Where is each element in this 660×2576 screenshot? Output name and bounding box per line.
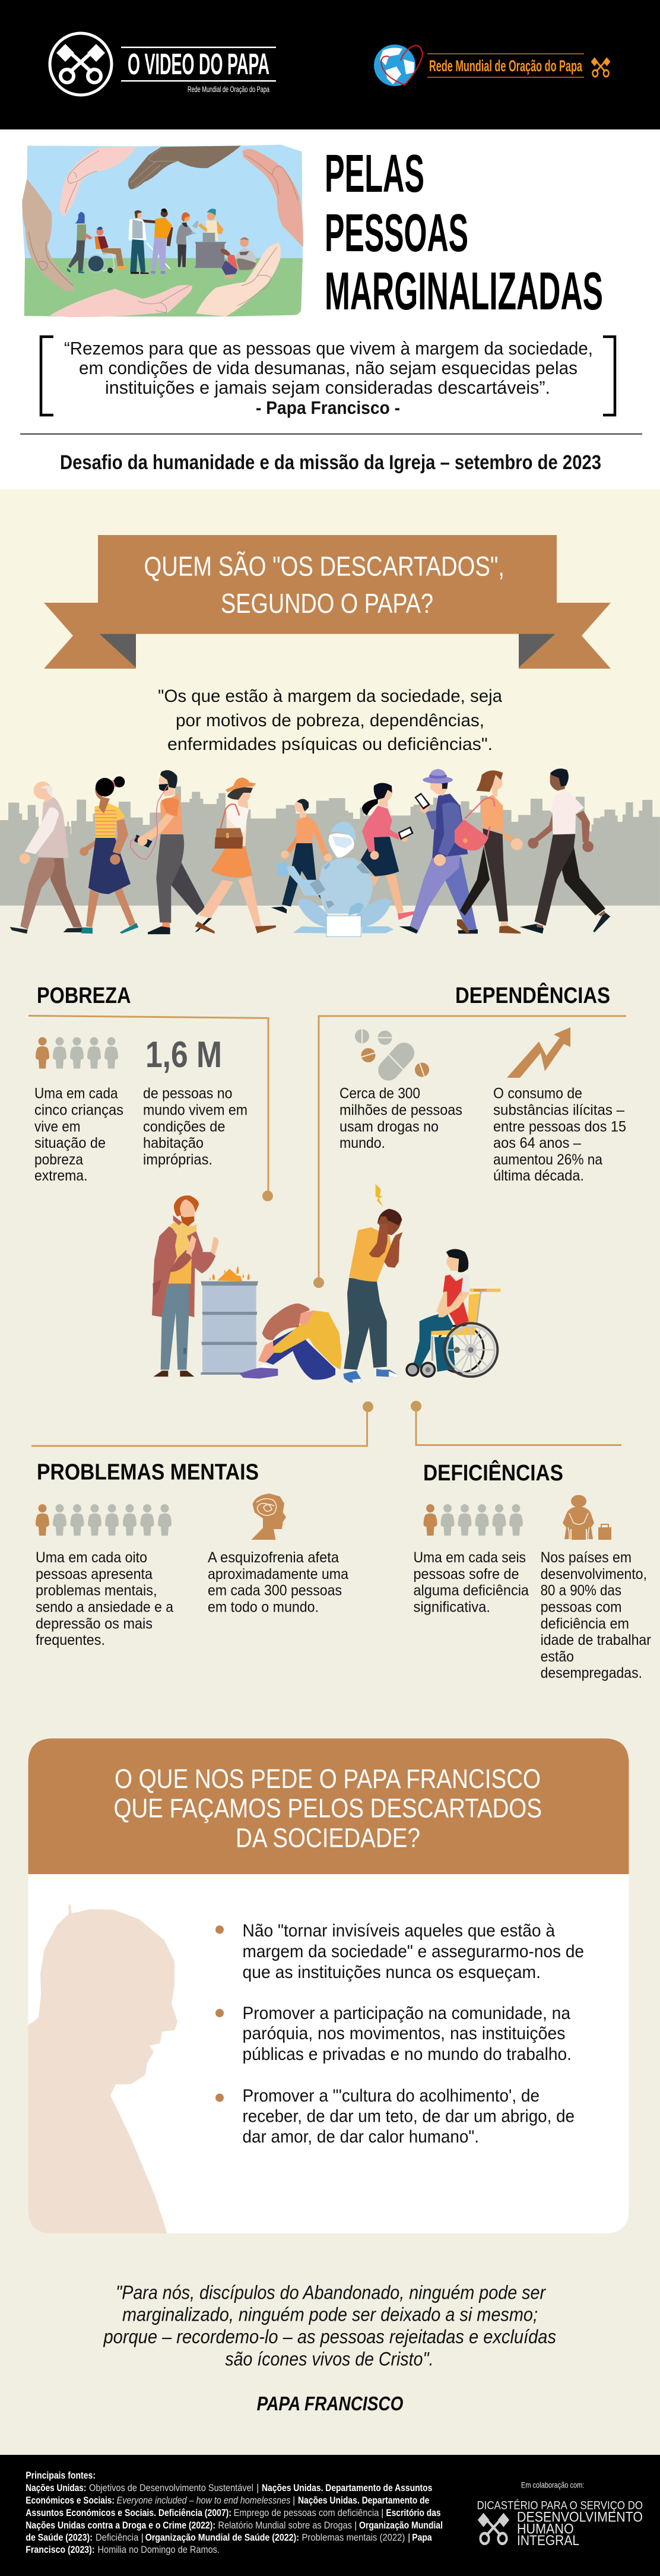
sources text: | xyxy=(408,2532,410,2543)
sources text: Organização Mundial de Saúde (2022): xyxy=(145,2532,299,2543)
person: bearded man with phone xyxy=(131,770,205,934)
sources text: Principais fontes: xyxy=(26,2470,96,2481)
text: mental problems stat: problemas mentais, xyxy=(36,1583,157,1599)
sources text: Organização Mundial xyxy=(359,2520,443,2531)
person: woman with blue skirt xyxy=(80,776,138,933)
text: one in five children: situação de xyxy=(34,1135,106,1151)
heading: Pobreza: POBREZA xyxy=(37,983,131,1008)
text: schizophrenia stat: em cada 300 pessoas xyxy=(208,1583,342,1599)
figure: crouching woman xyxy=(239,1303,342,1380)
text: schizophrenia stat: em todo o mundo. xyxy=(208,1599,319,1615)
panel: what the Pope asks xyxy=(28,1739,629,2233)
text: unemployment stat: idade de trabalhar xyxy=(541,1632,651,1648)
text: unemployment stat: 80 a 90% das xyxy=(541,1583,621,1599)
bullet one: Não "tornar invisíveis aqueles que estão à xyxy=(242,1921,555,1941)
text: illicit substances xyxy=(493,1086,626,1184)
sources text: Everyone included – how to end homelessnes xyxy=(116,2495,291,2506)
bullet three: Promover a "'cultura do acolhimento', de xyxy=(242,2086,540,2106)
text: mental problems stat: pessoas apresenta xyxy=(36,1566,153,1583)
sources text: | xyxy=(141,2532,144,2543)
text: drug users: mundo. xyxy=(339,1135,385,1151)
person: seated beggar (pale blue) xyxy=(277,821,394,936)
people: man in wheelchair xyxy=(88,227,126,273)
text: schizophrenia stat: aproximadamente uma xyxy=(208,1566,348,1583)
text: disability stat: alguma deficiência xyxy=(413,1583,529,1599)
text: illicit substances: O consumo de xyxy=(493,1086,582,1102)
figure: distressed man xyxy=(343,1184,402,1382)
text: illicit substances: substâncias ilícitas – xyxy=(493,1102,624,1119)
logo: O Video do Papa: O VIDEO DO PAPA xyxy=(128,48,269,81)
text: housing: impróprias. xyxy=(143,1151,212,1168)
collaboration logo: Dicastério: DESENVOLVIMENTO xyxy=(517,2509,643,2525)
text: disability stat xyxy=(413,1549,529,1615)
text: mental problems stat: sendo a ansiedade e a xyxy=(36,1599,173,1615)
panel heading band: O QUE NOS PEDE O PAPA FRANCISCO xyxy=(115,1764,541,1794)
bullet three: dar amor, de dar calor humano". xyxy=(242,2127,479,2147)
sources text: Objetivos de Desenvolvimento Sustentável xyxy=(89,2482,253,2493)
text: illicit substances: entre pessoas dos 15 xyxy=(493,1119,626,1135)
attribution: Papa Francisco: PAPA FRANCISCO xyxy=(257,2393,404,2414)
connector: mental problems xyxy=(31,1401,373,1446)
sources text: Nações Unidas. Departamento de xyxy=(298,2495,429,2506)
icon row: one in five people xyxy=(36,1037,118,1069)
person: man in white shirt xyxy=(520,768,610,933)
bullet one: que as instituições nunca os esqueçam. xyxy=(242,1963,541,1982)
icon: rising arrow xyxy=(507,1027,570,1078)
hand: top right xyxy=(242,149,303,247)
footer band xyxy=(0,2455,660,2576)
person: woman with hat and bag xyxy=(195,777,276,933)
sources text: de Saúde (2023): xyxy=(26,2532,93,2543)
sources text: Francisco (2023): xyxy=(26,2544,95,2555)
logo: O Video do Papa xyxy=(50,33,276,95)
text: unemployment stat: desempregadas. xyxy=(541,1665,642,1682)
text: one in five children: cinco crianças xyxy=(34,1102,123,1119)
sources text: | xyxy=(354,2520,357,2531)
ribbon banner: quem são os descartados xyxy=(44,535,611,669)
sources text: Problemas mentais (2022) xyxy=(302,2532,405,2543)
text: one in five children: extrema. xyxy=(34,1167,88,1184)
text: housing: de pessoas no xyxy=(143,1086,233,1102)
text: unemployment stat xyxy=(541,1549,651,1682)
sources text: Assuntos Económicos e Sociais. Deficiência (2007): xyxy=(26,2507,231,2518)
bullet three: receber, de dar um teto, de dar um abrigo, de xyxy=(242,2107,575,2126)
prayer quote with brackets: em condições de vida desumanas, não sejam esquecidas pelas xyxy=(79,357,578,378)
quote: os que estão à margem xyxy=(158,686,502,754)
panel heading band xyxy=(28,1739,629,1874)
text: drug users: Cerca de 300 xyxy=(339,1086,420,1102)
title: PELAS xyxy=(325,144,424,204)
people: person with bowl xyxy=(176,212,199,267)
heading: Deficiências: DEFICIÊNCIAS xyxy=(423,1460,563,1486)
icon: unemployed worker with briefcase xyxy=(563,1495,611,1540)
closing quote: são ícones vivos de Cristo". xyxy=(225,2349,433,2370)
walking people: group three xyxy=(455,768,610,933)
bullet three xyxy=(215,2086,575,2147)
title xyxy=(325,144,603,321)
sources text: | xyxy=(381,2507,383,2518)
quote: os que estão à margem: "Os que estão à margem da sociedade, seja xyxy=(158,686,502,706)
panel heading band: QUE FAÇAMOS PELOS DESCARTADOS xyxy=(114,1793,542,1824)
logo: O Video do Papa: Rede Mundial de Oração do Papa xyxy=(188,84,269,94)
text: drug users: usam drogas no xyxy=(339,1119,439,1135)
text: housing: habitação xyxy=(143,1135,204,1151)
person: old man xyxy=(10,781,82,933)
sources text: Nações Unidas. Departamento de Assuntos xyxy=(262,2482,432,2493)
prayer quote with brackets: “Rezemos para que as pessoas que vivem à margem da sociedade, xyxy=(64,338,593,359)
icon: head with tangled brain xyxy=(251,1493,286,1540)
text: disability stat: significativa. xyxy=(413,1599,490,1615)
sources text: Nações Unidas contra a Droga e o Crime (2022): xyxy=(26,2520,215,2531)
text: disability stat: pessoas sofre de xyxy=(413,1566,519,1583)
figure: woman in wheelchair xyxy=(405,1249,500,1378)
hand: left xyxy=(22,179,74,291)
text: housing: condições de xyxy=(143,1119,225,1135)
text: housing: mundo vivem em xyxy=(143,1102,248,1119)
person: boy xyxy=(271,799,332,913)
collaboration logo: Dicastério: INTEGRAL xyxy=(517,2533,579,2549)
text: one in five children xyxy=(34,1086,123,1184)
walking people: group one xyxy=(10,770,276,934)
text: housing xyxy=(143,1086,248,1168)
people: seated pair xyxy=(221,238,256,279)
hero illustration: hands around people xyxy=(22,145,303,317)
collaboration logo: Dicastério: HUMANO xyxy=(517,2521,574,2537)
prayer quote with brackets: - Papa Francisco - xyxy=(256,397,400,418)
silhouette of Pope Francis xyxy=(28,1905,177,2233)
text: unemployment stat: pessoas com xyxy=(541,1599,622,1615)
closing quote: "Para nós, discípulos do Abandonado, ninguém pode ser xyxy=(116,2282,546,2303)
text: schizophrenia stat: A esquizofrenia afeta xyxy=(208,1549,339,1566)
bullet two: paróquia, nos movimentos, nas instituições xyxy=(242,2024,565,2043)
sources text: | xyxy=(256,2482,259,2493)
text: mental problems stat: depressão os mais xyxy=(36,1615,153,1632)
text: one in five children: pobreza xyxy=(34,1151,83,1168)
sources text: Homilia no Domingo de Ramos. xyxy=(97,2544,220,2555)
sources text xyxy=(26,2470,443,2555)
sources text: Nações Unidas: xyxy=(26,2482,86,2493)
text: illicit substances: aumentou 26% na xyxy=(493,1151,602,1168)
text: unemployment stat: desenvolvimento, xyxy=(541,1566,647,1583)
closing quote: porque – recordemo-lo – as pessoas rejeitadas e excluídas xyxy=(103,2326,556,2347)
text: one in five children: vive em xyxy=(34,1119,81,1135)
connector: poverty xyxy=(28,1015,273,1201)
text: schizophrenia stat xyxy=(208,1549,348,1615)
icon row: one in eight people xyxy=(36,1504,172,1536)
sources text: Emprego de pessoas com deficiência xyxy=(234,2507,379,2518)
closing quote xyxy=(103,2282,556,2370)
text: drug users xyxy=(339,1086,462,1151)
person: man with hat and phone xyxy=(399,769,478,933)
text: unemployment stat: estão xyxy=(541,1648,574,1665)
sources text: Escritório das xyxy=(386,2507,441,2518)
text: illicit substances: última década. xyxy=(493,1167,584,1184)
text: mental problems stat xyxy=(36,1549,173,1648)
text: unemployment stat: Nos países em xyxy=(541,1549,632,1566)
walking people: group two xyxy=(271,769,478,936)
people: blind man with cane xyxy=(129,210,170,274)
hand: top brown xyxy=(128,145,241,189)
panel heading band: DA SOCIEDADE? xyxy=(236,1823,420,1853)
bullet two xyxy=(215,2004,572,2064)
city skyline xyxy=(0,786,660,906)
sources text: Papa xyxy=(412,2532,432,2543)
illustration: distressed man and woman in wheelchair xyxy=(343,1184,500,1382)
text: mental problems stat: Uma em cada oito xyxy=(36,1549,147,1566)
ribbon banner: quem são os descartados: SEGUNDO O PAPA? xyxy=(221,588,433,619)
text: mental problems stat: frequentes. xyxy=(36,1632,105,1648)
person: woman with red bag xyxy=(455,770,523,933)
text: drug users: milhões de pessoas xyxy=(339,1102,462,1119)
icon: pills xyxy=(355,1029,429,1085)
heading: Problemas mentais: PROBLEMAS MENTAIS xyxy=(37,1460,259,1485)
person: red top woman with phone xyxy=(361,783,415,920)
logo: Rede Mundial de Oração do Papa xyxy=(374,45,610,86)
bullet two: públicas e privadas e no mundo do trabalho. xyxy=(242,2045,572,2064)
text: one in five children: Uma em cada xyxy=(34,1086,118,1102)
people: woman pushing wheelchair xyxy=(67,212,93,273)
people: cook with pot and table xyxy=(195,208,227,268)
hand: bottom right xyxy=(196,243,281,317)
quote: os que estão à margem: por motivos de pobreza, dependências, xyxy=(176,711,484,730)
text: disability stat: Uma em cada seis xyxy=(413,1549,526,1566)
bullet two: Promover a participação na comunidade, na xyxy=(242,2004,570,2023)
hand: bottom xyxy=(49,285,192,317)
figure: barrel with fire xyxy=(201,1266,258,1375)
text: illicit substances: aos 64 anos – xyxy=(493,1135,581,1151)
collaboration logo: Dicastério: DICASTÉRIO PARA O SERVIÇO DO xyxy=(477,2500,643,2512)
connector: disabilities xyxy=(411,1401,621,1445)
sources text: Deficiência xyxy=(96,2532,139,2543)
connector: dependencies xyxy=(313,1016,626,1288)
title: PESSOAS xyxy=(325,204,468,263)
sources text: Relatório Mundial sobre as Drogas xyxy=(218,2520,352,2531)
figure: cold man xyxy=(152,1195,218,1376)
people: man in orange shirt xyxy=(142,208,173,274)
closing quote: marginalizado, ninguém pode ser deixado a si mesmo; xyxy=(122,2304,538,2325)
ribbon banner: quem são os descartados: QUEM SÃO "OS DESCARTADOS", xyxy=(144,551,504,582)
bullet one: margem da sociedade" e assegurarmo-nos de xyxy=(242,1942,584,1961)
bullet one xyxy=(215,1921,584,1982)
prayer quote with brackets: instituições e jamais sejam consideradas descartáveis”. xyxy=(105,377,550,398)
heading: Dependências: DEPENDÊNCIAS xyxy=(455,982,610,1008)
collaboration logo: Dicastério xyxy=(477,2480,643,2549)
sources text: Económicos e Sociais: xyxy=(26,2495,115,2506)
text: unemployment stat: deficiência em xyxy=(541,1615,629,1632)
collaboration logo: Dicastério: Em colaboração com: xyxy=(521,2480,584,2489)
illustration: man warming by barrel fire and crouching woman xyxy=(152,1195,342,1380)
icon row: one in six people xyxy=(424,1504,523,1536)
quote: os que estão à margem: enfermidades psíquicas ou deficiências". xyxy=(167,735,493,754)
big number: 1,6 M: 1,6 M xyxy=(145,1034,222,1075)
sources text: | xyxy=(293,2495,295,2506)
header band xyxy=(0,0,660,129)
hand: top left xyxy=(60,147,136,216)
prayer quote with brackets xyxy=(41,337,615,418)
